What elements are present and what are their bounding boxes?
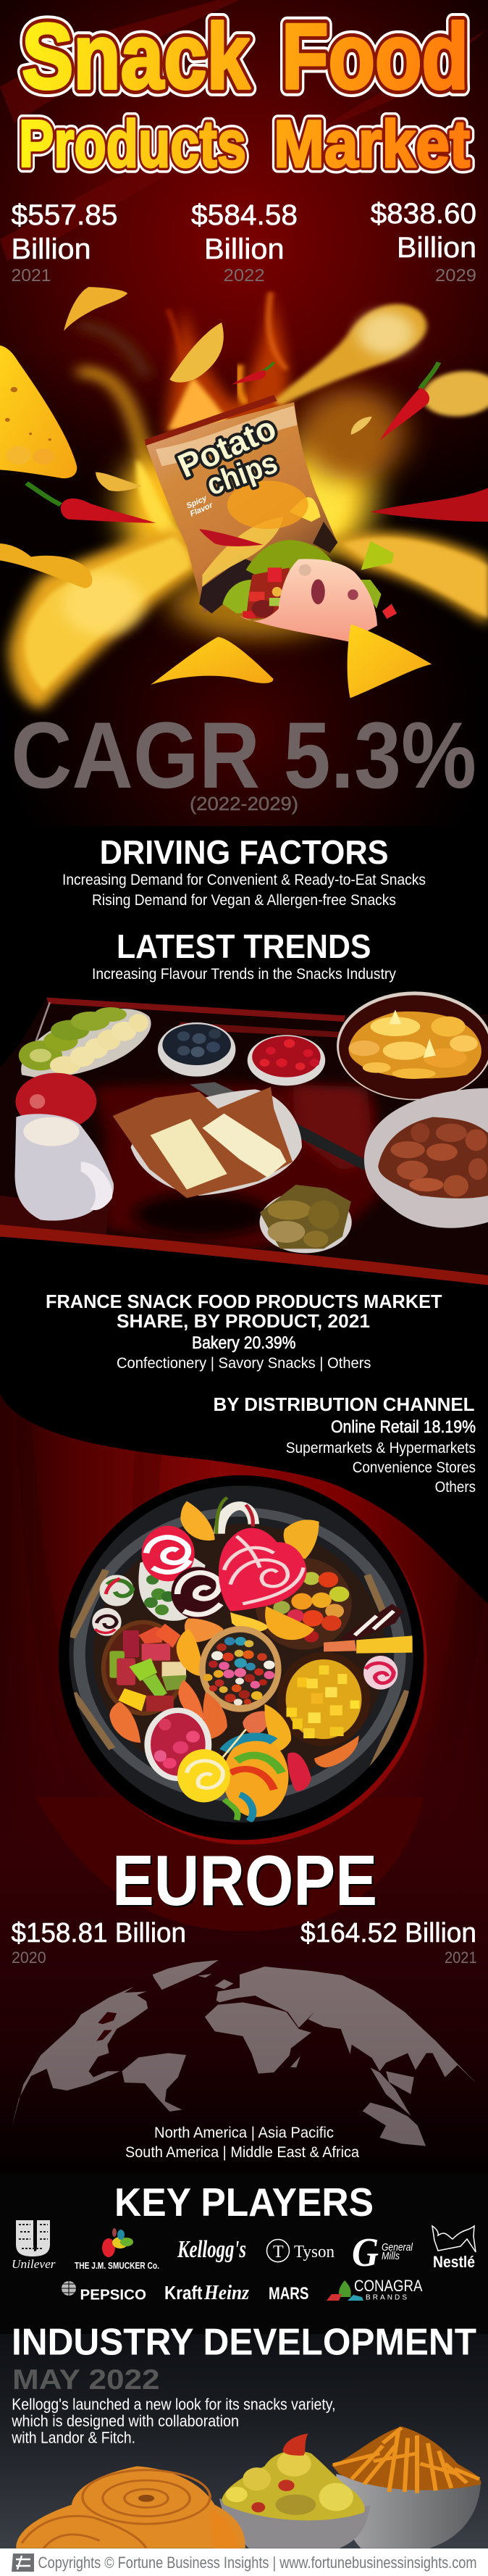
logo: General Mills: General bbox=[382, 2241, 413, 2254]
trend item: Increasing Flavour Trends in the Snacks Industry bbox=[92, 966, 396, 983]
industry development background bbox=[0, 2334, 488, 2551]
CAGR period: (2022-2029) bbox=[190, 793, 298, 814]
logo: Conagra Brands: BRANDS bbox=[366, 2294, 407, 2301]
footer bar bbox=[0, 2548, 488, 2576]
regions: line 2: South America | Middle East & Africa bbox=[125, 2144, 359, 2161]
title: Market bbox=[274, 107, 470, 181]
blurred big chip: lower left bbox=[9, 527, 202, 710]
stat: 2029: 2029 bbox=[435, 266, 476, 285]
sweets bowl bbox=[199, 1626, 282, 1712]
world map bbox=[12, 1960, 476, 2146]
development text: which is designed with collaboration bbox=[11, 2412, 239, 2430]
candy cane bbox=[219, 1506, 253, 1534]
Hudson bay cut-outs bbox=[96, 2012, 117, 2041]
chip: small near bag bbox=[96, 472, 142, 491]
stat: 2021: 2021 bbox=[12, 266, 51, 285]
driving factor 2: Rising Demand for Vegan & Allergen-free Snacks bbox=[92, 892, 396, 909]
blueberries bowl bbox=[158, 1022, 235, 1077]
lemon slice: top right bbox=[284, 1520, 319, 1559]
rainbow lollipop bbox=[218, 1730, 288, 1821]
logo: PepsiCo bbox=[62, 2281, 146, 2303]
background: top section bbox=[0, 0, 488, 1478]
right bowl with sev bbox=[332, 2427, 481, 2548]
title: Products bbox=[19, 107, 246, 181]
chilli: upper right bbox=[379, 362, 439, 441]
bag flavour label bbox=[185, 493, 214, 519]
seed snack bowl bbox=[259, 1185, 352, 1253]
heading: Europe: EUROPE bbox=[112, 1841, 377, 1920]
chip: top bbox=[169, 322, 224, 383]
stat: 2022: 2022 bbox=[224, 266, 265, 285]
logo: Kraft Heinz: Heinz bbox=[203, 2282, 249, 2304]
date: MAY 2022 bbox=[12, 2364, 160, 2396]
blurred chip: upper streak bbox=[274, 304, 426, 406]
small lollipops left bbox=[92, 1575, 134, 1636]
development text: Kellogg's launched a new look for its snacks variety, bbox=[12, 2396, 336, 2414]
stat: 2029 bbox=[371, 198, 476, 285]
logo: Unilever bbox=[12, 2220, 56, 2271]
glow bbox=[280, 433, 374, 553]
title bbox=[19, 5, 470, 181]
stat: Europe 2020: 2020 bbox=[12, 1948, 46, 1967]
development text bbox=[11, 2396, 336, 2447]
nacho: top left bbox=[64, 287, 127, 331]
logo: Conagra Brands bbox=[327, 2277, 423, 2301]
Iceland and UK bbox=[198, 1974, 233, 1989]
logo: Conagra Brands: CONAGRA bbox=[354, 2277, 423, 2295]
heading: share by product: SHARE, BY PRODUCT, 2021 bbox=[117, 1310, 370, 1332]
bread plate bbox=[113, 1087, 302, 1198]
puffed cereal bowl bbox=[364, 1088, 488, 1228]
Greenland bbox=[153, 1960, 219, 1990]
bag flavour label: Flavor bbox=[189, 501, 214, 519]
channel: supermarkets: Supermarkets & Hypermarkets bbox=[286, 1440, 476, 1456]
bag wording: Potato bbox=[172, 409, 282, 485]
chip: small right bbox=[351, 417, 372, 435]
lollipop: red swirl bbox=[142, 1526, 195, 1581]
logo: Kraft Heinz bbox=[164, 2282, 249, 2304]
citrus slices middle bbox=[185, 1606, 314, 1643]
logo: Kellogg's: Kellogg's bbox=[177, 2236, 246, 2263]
title: Snack bbox=[22, 5, 251, 109]
nacho: big left bbox=[0, 346, 77, 478]
photo: candy platter circle bbox=[59, 1475, 427, 1845]
lollipop: dark swirl bbox=[171, 1567, 224, 1619]
Bakery share: Bakery 20.39% bbox=[192, 1333, 295, 1353]
Australia bbox=[363, 2103, 426, 2146]
photo: breakfast tray bbox=[0, 991, 488, 1285]
chip: left lower bbox=[0, 543, 92, 588]
small lollipop right bbox=[363, 1656, 397, 1690]
logo: General Mills: Mills bbox=[382, 2250, 400, 2262]
logo: Tyson: T bbox=[273, 2243, 284, 2262]
heading: industry development: INDUSTRY DEVELOPMENT bbox=[12, 2322, 476, 2364]
nacho: bottom right bbox=[348, 625, 432, 698]
Southeast Asia islands bbox=[371, 2067, 414, 2116]
striped lollipop right bbox=[324, 1604, 413, 1654]
driving factor 1: Increasing Demand for Convenient & Ready-to-Eat Snacks bbox=[62, 872, 426, 888]
logo: General Mills bbox=[352, 2230, 413, 2275]
flames bbox=[77, 290, 288, 522]
orange slice: top bbox=[180, 1501, 215, 1541]
heart lollipop bbox=[219, 1528, 306, 1611]
logo: J.M. Smucker: THE J.M. SMUCKER Co. bbox=[75, 2260, 159, 2271]
stat: 2022: Billion bbox=[204, 233, 284, 265]
stat: 2021: $557.85 bbox=[12, 199, 117, 231]
cubes bowl bbox=[277, 1652, 371, 1746]
footer logo bbox=[12, 2554, 34, 2572]
stat: Europe 2021: 2021 bbox=[445, 1948, 477, 1967]
logo: Kraft Heinz: Kraft bbox=[164, 2282, 203, 2304]
nacho: bottom centre bbox=[151, 637, 273, 685]
cereal flakes bowl bbox=[337, 991, 488, 1100]
stat: Europe 2021: $164.52 Billion bbox=[300, 1918, 476, 1948]
red berries bowl bbox=[248, 1035, 325, 1085]
heading: France market share: FRANCE SNACK FOOD PRODUCTS MARKET bbox=[46, 1291, 442, 1312]
chilli: right bbox=[371, 488, 488, 522]
stat: Europe 2020 bbox=[12, 1918, 186, 1967]
milk jug bbox=[15, 1114, 114, 1221]
logo: General Mills: G bbox=[352, 2230, 379, 2275]
jelly bowl bbox=[101, 1620, 187, 1716]
logo: Nestle bbox=[432, 2226, 476, 2271]
logo: Tyson bbox=[266, 2239, 335, 2262]
logo: Tyson: Tyson bbox=[294, 2243, 335, 2262]
citrus slices lower bbox=[109, 1680, 359, 1767]
logo: Unilever: Unilever bbox=[12, 2257, 56, 2271]
development text: with Landor & Fitch. bbox=[11, 2429, 135, 2447]
other products: Confectionery | Savory Snacks | Others bbox=[117, 1355, 371, 1372]
blurred big chip: right bbox=[330, 533, 488, 625]
yellow lollipop bbox=[177, 1749, 230, 1802]
stat: Europe 2021 bbox=[300, 1918, 477, 1967]
hero illustration: chips, flames, chillies and wrap bbox=[0, 287, 488, 710]
heading: by distribution channel: BY DISTRIBUTION CHANNEL bbox=[213, 1393, 475, 1415]
heading: driving factors: DRIVING FACTORS bbox=[100, 833, 389, 871]
chakli bbox=[16, 2467, 245, 2548]
bag flavour label: Spicy bbox=[185, 493, 209, 511]
title: Products bbox=[19, 107, 246, 181]
green candies bowl bbox=[138, 1551, 206, 1621]
wrap bbox=[222, 540, 397, 641]
logo: Nestle: Nestlé bbox=[433, 2253, 475, 2271]
kiwi and banana plate bbox=[19, 1007, 151, 1077]
title: Market bbox=[274, 107, 470, 181]
logo: PepsiCo: PEPSICO bbox=[80, 2287, 146, 2303]
lower background bbox=[0, 1797, 488, 2196]
stat: 2022 bbox=[191, 199, 298, 285]
title: Snack bbox=[22, 5, 251, 109]
apple bbox=[15, 1073, 96, 1130]
black band curve over red curtain background bbox=[0, 1362, 488, 1898]
Madagascar bbox=[290, 2056, 300, 2067]
Africa bbox=[205, 2002, 311, 2074]
channel: others: Others bbox=[435, 1479, 476, 1496]
blurred chip: top right bbox=[416, 366, 488, 422]
stat: 2021 bbox=[12, 199, 117, 285]
logo: J.M. Smucker bbox=[75, 2228, 159, 2271]
stat: Europe 2020: $158.81 Billion bbox=[12, 1918, 186, 1948]
Eurasia bbox=[216, 1967, 476, 2083]
North America bbox=[12, 1987, 148, 2127]
South America bbox=[122, 2053, 186, 2112]
heading: key players: KEY PLAYERS bbox=[114, 2180, 374, 2225]
title: Snack bbox=[22, 5, 251, 109]
key players background bbox=[0, 2174, 488, 2334]
potato chips bag bbox=[145, 395, 337, 614]
bag wording: chips: chips bbox=[202, 445, 282, 501]
right gumball bowl bbox=[255, 1558, 352, 1650]
striped lollipop bottom right bbox=[287, 1753, 311, 1791]
sticks and ropes bbox=[72, 1570, 408, 1773]
title: Products bbox=[19, 107, 246, 181]
logo: Mars: MARS bbox=[269, 2284, 308, 2304]
regions: line 1: North America | Asia Pacific bbox=[154, 2125, 334, 2141]
middle bowl with mixture bbox=[219, 2433, 371, 2548]
chilli: left bbox=[27, 483, 156, 523]
pink candy bowl bbox=[144, 1708, 211, 1781]
stat: 2021: Billion bbox=[12, 233, 91, 265]
heading: latest trends: LATEST TRENDS bbox=[117, 928, 371, 965]
stat: 2029: Billion bbox=[397, 232, 476, 264]
chilli: top bbox=[232, 362, 274, 385]
title: Market bbox=[274, 107, 470, 181]
stat: 2029: $838.60 bbox=[371, 198, 476, 230]
knife bbox=[190, 1082, 367, 1170]
citrus slice left of sweets bowl bbox=[177, 1629, 201, 1676]
channel: convenience stores: Convenience Stores bbox=[353, 1459, 476, 1476]
stat: 2022: $584.58 bbox=[191, 199, 298, 231]
photo: snack bowls bbox=[16, 2427, 481, 2548]
